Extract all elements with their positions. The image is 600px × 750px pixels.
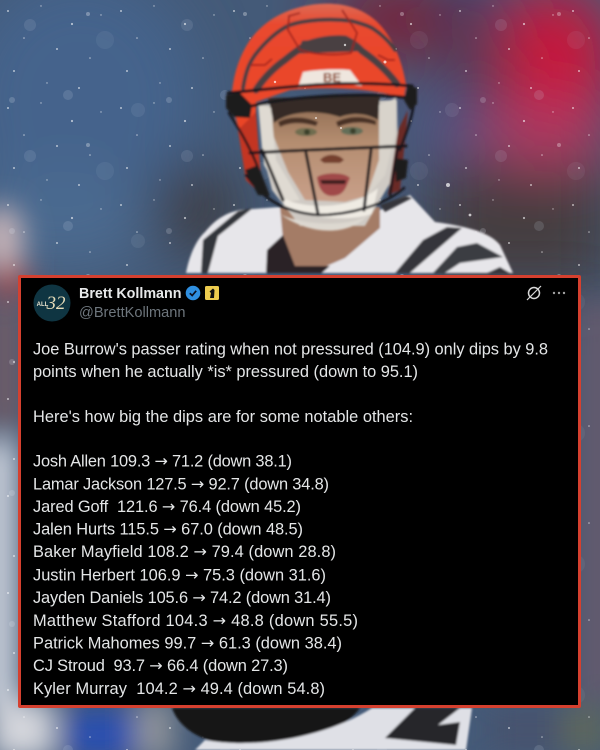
helmet <box>226 4 417 231</box>
icon: slashed circle <box>526 286 542 300</box>
helmet side pads <box>238 112 262 195</box>
avatar: All32 logo: ALL <box>37 302 49 308</box>
tweet body text: Here's how big the dips are for some notable others: <box>33 408 413 426</box>
icon: yellow badge <box>205 286 219 300</box>
avatar: All32 logo <box>34 284 70 322</box>
face <box>272 102 379 202</box>
shell red vents <box>250 10 395 65</box>
quarterback jersey <box>172 195 513 750</box>
tweet body text: points when he actually *is* pressured (down to 95.1) <box>33 363 418 381</box>
avatar: All32 logo: 32 <box>46 293 66 314</box>
arm shadow at right edge <box>568 675 581 697</box>
tweet body text: Justin Herbert 106.9 → 75.3 (down 31.6) <box>33 566 326 584</box>
tweet body text: Baker Mayfield 108.2 → 79.4 (down 28.8) <box>33 542 336 561</box>
tweet body text: CJ Stroud 93.7 → 66.4 (down 27.3) <box>33 656 288 675</box>
icon: more dots <box>552 292 566 294</box>
tweet card <box>18 275 581 708</box>
tweet body text: Jalen Hurts 115.5 → 67.0 (down 48.5) <box>33 520 303 538</box>
helmet logo plate <box>298 69 362 88</box>
shell dark stripes <box>243 20 397 90</box>
tweet body text: Patrick Mahomes 99.7 → 61.3 (down 38.4) <box>33 634 342 652</box>
tweet body text: Josh Allen 109.3 → 71.2 (down 38.1) <box>33 452 292 470</box>
Bengals logo: BE <box>323 70 341 85</box>
author handle: @BrettKollmann <box>79 305 185 321</box>
author name: Brett Kollmann <box>79 286 181 302</box>
icon: verified badge <box>186 286 200 300</box>
chest plate patch <box>380 196 412 212</box>
facemask bars <box>228 84 414 215</box>
snow flakes over player <box>274 44 471 216</box>
tweet body text: Kyler Murray 104.2 → 49.4 (down 54.8) <box>33 679 325 698</box>
tweet body text: Joe Burrow's passer rating when not pressured (104.9) only dips by 9.8 <box>33 340 548 358</box>
helmet hardware <box>226 85 417 196</box>
tweet body text: Jared Goff 121.6 → 76.4 (down 45.2) <box>33 497 301 516</box>
tweet body text: Matthew Stafford 104.3 → 48.8 (down 55.5) <box>33 611 358 630</box>
jersey below card <box>172 708 360 746</box>
tweet body text: Jayden Daniels 105.6 → 74.2 (down 31.4) <box>33 588 331 607</box>
helmet lining <box>258 100 398 226</box>
tweet body text: Lamar Jackson 127.5 → 92.7 (down 34.8) <box>33 474 329 494</box>
orange shell <box>232 4 406 150</box>
